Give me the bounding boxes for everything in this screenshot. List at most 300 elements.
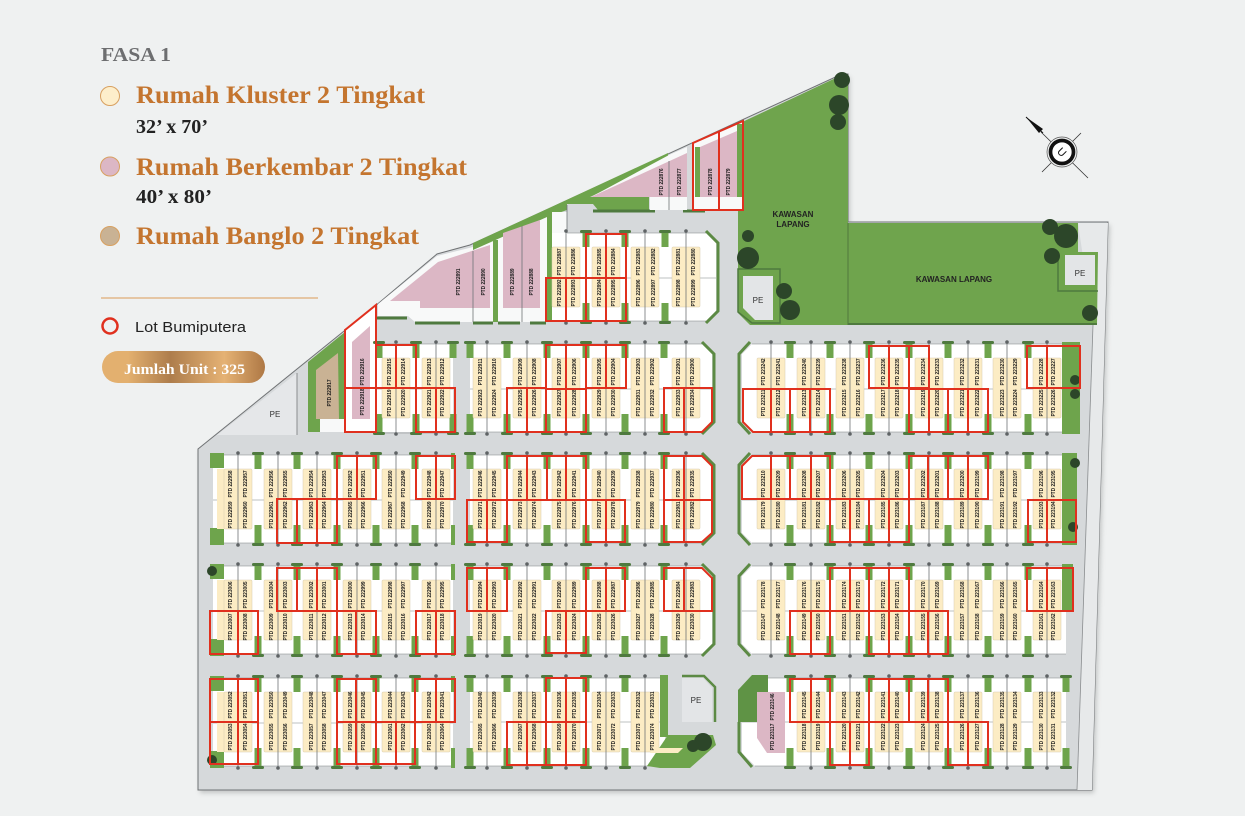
lot labels: PTD 223227: [1051, 358, 1057, 386]
lot labels: PTD 223069: [557, 723, 563, 751]
lot labels: PTD 222901: [676, 358, 682, 386]
lot labels: PTD 223136: [975, 691, 981, 719]
lot labels: PTD 222995: [440, 581, 446, 609]
semi-detached lots: 222891, 222890: [390, 245, 490, 322]
lot labels: PTD 223132: [1051, 691, 1057, 719]
lot labels: PTD 223034: [597, 691, 603, 719]
lot labels: PTD 222970: [440, 501, 446, 529]
lot labels: PTD 223186: [895, 501, 901, 529]
lot labels: PTD 223179: [761, 501, 767, 529]
block T: lots 222880-222899: [546, 229, 718, 325]
lot labels: PTD 222977: [597, 501, 603, 529]
lot labels: PTD 223203: [895, 470, 901, 498]
open space: north park: LAPANG: [776, 220, 810, 229]
lot labels: PTD 223154: [895, 613, 901, 641]
lot labels: PTD 223062: [401, 723, 407, 751]
lot labels: PTD 223153: [881, 613, 887, 641]
lot labels: PTD 223068: [532, 723, 538, 751]
lot labels: PTD 222942: [557, 470, 563, 498]
lot labels: PTD 223176: [802, 581, 808, 609]
lot labels: PTD 222929: [597, 389, 603, 417]
lot labels: PTD 222881: [676, 248, 682, 276]
PE west: [217, 373, 297, 435]
lot labels: PTD 223232: [960, 358, 966, 386]
site plan: [198, 72, 1110, 793]
block A: lots 222912-222922: [345, 305, 459, 436]
lot labels: PTD 222937: [650, 470, 656, 498]
lot labels: PTD 223029: [676, 613, 682, 641]
lot labels: PTD 222984: [676, 581, 682, 609]
lot labels: PTD 222981: [676, 501, 682, 529]
lot labels: PTD 222974: [532, 501, 538, 529]
lot labels: PTD 222928: [572, 389, 578, 417]
lot labels: PTD 222931: [636, 389, 642, 417]
lot labels: PTD 222932: [650, 389, 656, 417]
lot labels: PTD 223219: [921, 389, 927, 417]
lot labels: PTD 223145: [802, 691, 808, 719]
semi-detached lots: 222876, 222877: PTD 222876: [659, 168, 665, 196]
lot labels: PTD 223233: [935, 358, 941, 386]
lot labels: PTD 223164: [1039, 581, 1045, 609]
lot labels: PTD 223032: [636, 691, 642, 719]
lot labels: PTD 222969: [427, 501, 433, 529]
lot labels: PTD 222897: [651, 279, 657, 307]
lot labels: PTD 223151: [842, 613, 848, 641]
lot labels: [478, 358, 696, 417]
lot labels: PTD 222908: [532, 358, 538, 386]
lot labels: PTD 223007: [228, 613, 234, 641]
lot labels: PTD 223202: [921, 470, 927, 498]
landscaped corner: [647, 675, 716, 768]
lot labels: PTD 223221: [960, 389, 966, 417]
lot labels: PTD 223127: [975, 723, 981, 751]
lot labels: PTD 223064: [440, 723, 446, 751]
lot labels: PTD 223206: [842, 470, 848, 498]
lot labels: PTD 223056: [283, 723, 289, 751]
lot labels: PTD 223150: [816, 613, 822, 641]
lot labels: PTD 222940: [597, 470, 603, 498]
lot labels: PTD 223143: [842, 691, 848, 719]
lot labels: PTD 223066: [492, 723, 498, 751]
lot labels: PTD 222979: [636, 501, 642, 529]
lot labels: PTD 223239: [816, 358, 822, 386]
legend label: bumiputera lot: Lot Bumiputera: [135, 319, 247, 336]
semi-detached lots 222916, 222918: PTD 222918: [360, 388, 366, 416]
lot labels: PTD 222895: [611, 279, 617, 307]
lot labels: PTD 222922: [440, 389, 446, 417]
lot labels: PTD 222919: [387, 389, 393, 417]
bumiputera outline: [742, 456, 1076, 542]
legend label: bungalow: Rumah Banglo 2 Tingkat: [136, 223, 420, 250]
lot labels: PTD 223171: [895, 581, 901, 609]
lot labels: PTD 223013: [348, 613, 354, 641]
lot labels: PTD 222912: [440, 358, 446, 386]
lot labels: PTD 223000: [348, 581, 354, 609]
lot labels: PTD 222914: [401, 358, 407, 386]
lot labels: PTD 223210: [761, 470, 767, 498]
lot labels: [761, 581, 1057, 641]
lot labels: PTD 223137: [960, 691, 966, 719]
lot labels: PTD 223025: [597, 613, 603, 641]
lot labels: PTD 222958: [228, 470, 234, 498]
semi-detached lots: 222878, 222879: PTD 222878: [708, 168, 714, 196]
lot labels: PTD 223237: [856, 358, 862, 386]
lot labels: PTD 222962: [283, 501, 289, 529]
lot labels: PTD 222997: [401, 581, 407, 609]
PE west: PE: [270, 410, 280, 419]
semi-detached lots 222916, 222918: PTD 222916: [360, 358, 366, 386]
lot labels: PTD 222935: [690, 470, 696, 498]
lot labels: PTD 223003: [283, 581, 289, 609]
lot labels: [557, 248, 697, 307]
lot labels: PTD 222953: [322, 470, 328, 498]
lot labels: [761, 358, 1057, 417]
lot labels: PTD 223014: [361, 613, 367, 641]
lot labels: PTD 222911: [478, 358, 484, 385]
lot labels: PTD 223070: [572, 723, 578, 751]
lot labels: PTD 222893: [571, 279, 577, 307]
lot labels: PTD 223140: [895, 691, 901, 719]
lot labels: PTD 223226: [1051, 389, 1057, 417]
lot labels: PTD 222959: [228, 501, 234, 529]
lot labels: PTD 223054: [243, 723, 249, 751]
lot labels: PTD 223036: [557, 691, 563, 719]
lot labels: PTD 222999: [361, 581, 367, 609]
legend icon: bungalow: [100, 226, 120, 246]
block D: lots 222947-222970: [210, 451, 455, 547]
lot labels: PTD 223049: [283, 691, 289, 719]
bumiputera outline: [345, 305, 455, 432]
lot labels: PTD 223159: [1000, 613, 1006, 641]
lot labels: PTD 222964: [322, 501, 328, 529]
lot labels: PTD 223023: [557, 613, 563, 641]
lot labels: PTD 223035: [572, 691, 578, 719]
lot labels: PTD 222920: [401, 389, 407, 417]
lot labels: PTD 222989: [572, 581, 578, 609]
lot labels: PTD 223016: [401, 613, 407, 641]
lot labels: PTD 222882: [651, 248, 657, 276]
lot labels: PTD 222941: [572, 470, 578, 498]
semi-detached lots: 222889, 222888: PTD 222888: [529, 268, 535, 296]
lot labels: PTD 223001: [322, 581, 328, 609]
unit count badge: Jumlah Unit : 325: [124, 362, 245, 378]
lot labels: PTD 223162: [1051, 613, 1057, 641]
semi-detached lots: 222878, 222879: [693, 121, 743, 210]
lot labels: PTD 223073: [636, 723, 642, 751]
compass: [1026, 117, 1088, 178]
lot labels: PTD 223241: [776, 358, 782, 386]
open space: east park: [848, 223, 1098, 325]
open space: north park: [738, 75, 848, 325]
lot labels: PTD 223231: [975, 358, 981, 386]
lot labels: PTD 223160: [1013, 613, 1019, 641]
lot labels: PTD 223228: [1039, 358, 1045, 386]
lot labels: PTD 222987: [611, 581, 617, 609]
lot labels: PTD 223046: [348, 691, 354, 719]
lot labels: PTD 223031: [650, 691, 656, 719]
lot labels: PTD 223024: [572, 613, 578, 641]
lot labels: PTD 223053: [228, 723, 234, 751]
lot labels: PTD 222991: [532, 581, 538, 609]
legend icon: cluster house: [100, 86, 120, 106]
lot labels: PTD 222886: [571, 248, 577, 276]
semi-detached lots: 222891, 222890: PTD 222891: [456, 268, 462, 296]
lot labels: PTD 223057: [309, 723, 315, 751]
lot labels: PTD 222947: [440, 470, 446, 498]
open space: north park: KAWASAN: [773, 210, 814, 219]
lot labels: PTD 222960: [243, 501, 249, 529]
bumiputera outline: [467, 568, 712, 653]
lot labels: PTD 222957: [243, 470, 249, 498]
lot labels: PTD 222923: [478, 389, 484, 417]
lot labels: PTD 222961: [269, 501, 275, 529]
lot labels: PTD 222934: [690, 389, 696, 417]
bumiputera outline: [693, 121, 743, 210]
lot labels: PTD 222955: [283, 470, 289, 498]
lot labels: PTD 223028: [650, 613, 656, 641]
lot labels: PTD 223208: [802, 470, 808, 498]
lot labels: PTD 223167: [975, 581, 981, 609]
lot labels: PTD 223020: [492, 613, 498, 641]
compass: U: [1054, 146, 1068, 160]
lot labels: PTD 223051: [243, 691, 249, 719]
lot labels: PTD 223121: [856, 723, 862, 751]
lot labels: PTD 223198: [1000, 470, 1006, 498]
lot labels: PTD 222948: [427, 470, 433, 498]
lot labels: PTD 223044: [388, 691, 394, 719]
block E: lots 222935-222982: [464, 451, 714, 547]
lot labels: PTD 223128: [1000, 723, 1006, 751]
bungalow lot 222917: [308, 332, 345, 432]
lot labels: PTD 223126: [960, 723, 966, 751]
lot labels: PTD 222945: [492, 470, 498, 498]
lot labels: PTD 223222: [975, 389, 981, 417]
lot labels: PTD 223022: [532, 613, 538, 641]
lot labels: PTD 222905: [597, 358, 603, 386]
lot labels: [228, 581, 446, 641]
lot labels: PTD 222985: [650, 581, 656, 609]
legend label: cluster house: Rumah Kluster 2 Tingkat: [136, 82, 426, 109]
lot labels: PTD 223178: [761, 581, 767, 609]
lot labels: PTD 223156: [935, 613, 941, 641]
lot labels: PTD 223187: [921, 501, 927, 529]
lot labels: PTD 223033: [611, 691, 617, 719]
lot labels: [228, 691, 446, 751]
lot labels: PTD 223173: [856, 581, 862, 609]
lot labels: PTD 223213: [802, 389, 808, 417]
lot labels: PTD 223120: [842, 723, 848, 751]
lot labels: PTD 223050: [269, 691, 275, 719]
lot labels: PTD 222900: [690, 358, 696, 386]
lot labels: [478, 470, 696, 529]
lot labels: PTD 223030: [690, 613, 696, 641]
lot labels: PTD 223130: [1039, 723, 1045, 751]
block K: lots 223031-223074: [464, 674, 716, 770]
bumiputera outline: [507, 678, 586, 765]
lot labels: PTD 223026: [611, 613, 617, 641]
lot labels: PTD 223165: [1013, 581, 1019, 609]
lot labels: PTD 223217: [881, 389, 887, 417]
lot labels: PTD 223184: [856, 501, 862, 529]
semi-detached lots: 222891, 222890: PTD 222890: [481, 268, 487, 296]
lot labels: PTD 223155: [921, 613, 927, 641]
lot labels: PTD 222909: [518, 358, 524, 386]
lot labels: PTD 223063: [427, 723, 433, 751]
lot labels: PTD 223018: [440, 613, 446, 641]
lot labels: PTD 223201: [935, 470, 941, 498]
lot labels: PTD 222925: [518, 389, 524, 417]
lot labels: PTD 222926: [532, 389, 538, 417]
lot labels: PTD 223015: [388, 613, 394, 641]
lot labels: PTD 222885: [597, 248, 603, 276]
lot labels: PTD 223125: [935, 723, 941, 751]
lot labels: PTD 223037: [532, 691, 538, 719]
lot labels: PTD 222903: [636, 358, 642, 386]
lot labels: PTD 222949: [401, 470, 407, 498]
lot labels: PTD 223224: [1013, 389, 1019, 417]
block C: lots 223211-223242: [739, 340, 1080, 436]
lot labels: PTD 223204: [881, 470, 887, 498]
bungalow lot 222917: PTD 222917: [327, 379, 333, 407]
lot labels: PTD 223152: [856, 613, 862, 641]
lot labels: PTD 223039: [492, 691, 498, 719]
lot labels: PTD 223181: [802, 501, 808, 529]
block F: lots 223179-223210: [739, 451, 1080, 547]
lot labels: PTD 223006: [228, 581, 234, 609]
block B: lots 222900-222934: [464, 340, 714, 436]
lot labels: PTD 222967: [388, 501, 394, 529]
block J: lots 223041-223064: [207, 674, 455, 770]
lot labels: PTD 223058: [322, 723, 328, 751]
lot labels: PTD 223005: [243, 581, 249, 609]
lot labels: PTD 222998: [388, 581, 394, 609]
lot labels: PTD 223193: [1039, 501, 1045, 529]
lot labels: [478, 691, 656, 751]
lot labels: PTD 223131: [1051, 723, 1057, 751]
lot labels: PTD 223166: [1000, 581, 1006, 609]
lot labels: PTD 223144: [816, 691, 822, 719]
lot labels: PTD 223133: [1039, 691, 1045, 719]
lot labels: PTD 223180: [776, 501, 782, 529]
lot labels: PTD 222904: [611, 358, 617, 386]
lot labels: PTD 223209: [776, 470, 782, 498]
lot labels: PTD 222983: [690, 581, 696, 609]
lot labels: PTD 222963: [309, 501, 315, 529]
lot labels: PTD 223048: [309, 691, 315, 719]
lot labels: PTD 223214: [816, 389, 822, 417]
lot labels: PTD 223158: [975, 613, 981, 641]
lot labels: PTD 223215: [842, 389, 848, 417]
bumiputera outline: [277, 456, 455, 543]
lot labels: PTD 222951: [361, 470, 367, 498]
lot labels: PTD 223122: [881, 723, 887, 751]
lot labels: [387, 358, 446, 417]
lot labels: PTD 222936: [676, 470, 682, 498]
lot labels: PTD 223009: [269, 613, 275, 641]
lot labels: PTD 223230: [1000, 358, 1006, 386]
lot labels: PTD 223041: [440, 691, 446, 719]
lot labels: PTD 222976: [572, 501, 578, 529]
lot labels: PTD 222972: [492, 501, 498, 529]
semi-detached lots 223146, 223117: PTD 223146: [770, 693, 776, 721]
lot labels: PTD 222938: [636, 470, 642, 498]
lot labels: PTD 222996: [427, 581, 433, 609]
lot labels: PTD 223218: [895, 389, 901, 417]
block I: lots 223147-223178: [739, 562, 1073, 658]
lot labels: PTD 223043: [401, 691, 407, 719]
lot labels: PTD 222944: [518, 470, 524, 498]
lot labels: PTD 223118: [802, 723, 808, 750]
lot labels: PTD 222980: [650, 501, 656, 529]
lot labels: PTD 223123: [895, 723, 901, 751]
lot labels: PTD 223182: [816, 501, 822, 529]
lot labels: PTD 223161: [1039, 613, 1045, 641]
lot labels: PTD 223139: [921, 691, 927, 719]
semi-detached lots 222916, 222918: [345, 305, 376, 432]
lot labels: PTD 223002: [309, 581, 315, 609]
lot labels: PTD 223042: [427, 691, 433, 719]
trees: [1070, 375, 1080, 399]
lot labels: PTD 223172: [881, 581, 887, 609]
lot labels: PTD 223065: [478, 723, 484, 751]
lot labels: PTD 222954: [309, 470, 315, 498]
lot labels: [228, 470, 446, 529]
lot labels: PTD 222971: [478, 501, 484, 529]
lot labels: PTD 222899: [691, 279, 697, 307]
lot labels: PTD 222990: [557, 581, 563, 609]
lot labels: PTD 223234: [921, 358, 927, 386]
PE east: PE: [1075, 269, 1085, 278]
lot labels: PTD 223147: [761, 613, 767, 641]
lot labels: PTD 223017: [427, 613, 433, 641]
lot labels: PTD 222906: [572, 358, 578, 386]
lot labels: PTD 223163: [1051, 581, 1057, 609]
PE north: PE: [753, 296, 763, 305]
lot labels: PTD 223004: [269, 581, 275, 609]
PE north: [738, 269, 780, 323]
lot labels: PTD 223072: [611, 723, 617, 751]
lot labels: PTD 223223: [1000, 389, 1006, 417]
lot labels: PTD 223212: [776, 389, 782, 417]
semi-detached lots: 222876, 222877: PTD 222877: [677, 168, 683, 196]
lot labels: PTD 223199: [975, 470, 981, 498]
lot labels: PTD 223008: [243, 613, 249, 641]
lot labels: PTD 223149: [802, 613, 808, 641]
lot labels: PTD 223060: [361, 723, 367, 751]
lot labels: PTD 223207: [816, 470, 822, 498]
lot labels: PTD 223235: [895, 358, 901, 386]
lot labels: PTD 223174: [842, 581, 848, 609]
lot labels: PTD 222883: [636, 248, 642, 276]
lot labels: PTD 222915: [387, 358, 393, 386]
lot labels: PTD 223183: [842, 501, 848, 529]
lot labels: PTD 223200: [960, 470, 966, 498]
semi-detached lots 223146, 223117: [757, 692, 785, 753]
lot labels: PTD 223148: [776, 613, 782, 641]
lot labels: PTD 222921: [427, 389, 433, 417]
lot labels: PTD 222894: [597, 279, 603, 307]
PE east: [1058, 252, 1098, 291]
lot labels: PTD 223124: [921, 723, 927, 751]
lot labels: PTD 223021: [518, 613, 524, 641]
bumiputera outline: [790, 679, 988, 765]
lot labels: PTD 222952: [348, 470, 354, 498]
legend panel: [100, 44, 468, 383]
block H: lots 222983-223030: [464, 562, 714, 658]
lot labels: PTD 223074: [650, 723, 656, 751]
lot labels: PTD 223240: [802, 358, 808, 386]
lot labels: PTD 222907: [557, 358, 563, 386]
